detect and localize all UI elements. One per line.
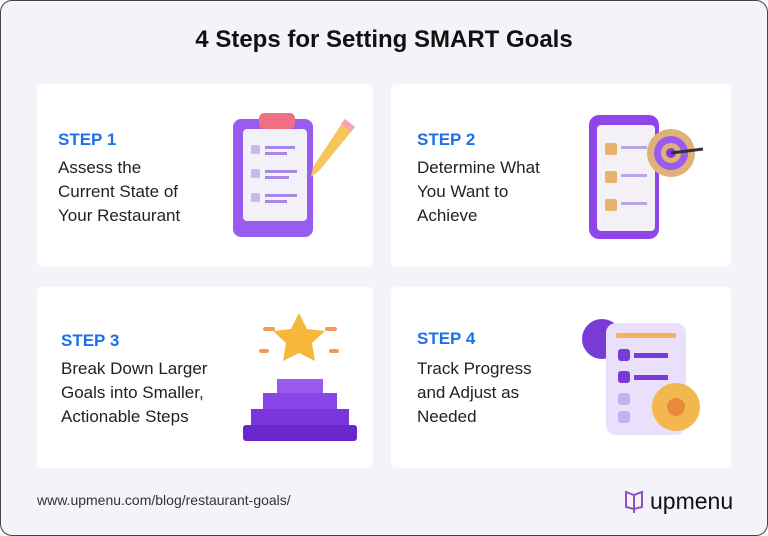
icon: clipboard with pencil — [233, 113, 355, 237]
logo: upmenu: upmenu — [650, 488, 733, 514]
step 3 label: STEP 3 — [61, 331, 119, 350]
step 1 text — [58, 158, 180, 225]
step 1 text: Current State of — [58, 182, 178, 201]
icon: checklist with target — [589, 115, 704, 239]
step 4 label: STEP 4 — [417, 329, 475, 348]
step 2 text: You Want to — [417, 182, 508, 201]
step 2 text — [417, 158, 540, 225]
step 1 text: Assess the — [58, 158, 141, 177]
step 1 label: STEP 1 — [58, 130, 116, 149]
step 4 text: Needed — [417, 407, 477, 426]
step 3 text: Break Down Larger — [61, 359, 207, 378]
title: 4 Steps for Setting SMART Goals — [195, 26, 573, 53]
panel: step 4 — [391, 287, 731, 468]
step 3 text: Goals into Smaller, — [61, 383, 204, 402]
icon: star on podium — [243, 313, 357, 441]
step 4 text — [417, 359, 532, 426]
step 3 text: Actionable Steps — [61, 407, 189, 426]
step 3 text — [61, 359, 208, 426]
panel: step 3 — [37, 287, 373, 468]
panel: step 1 — [37, 84, 373, 267]
step 2 label: STEP 2 — [417, 130, 475, 149]
step 2 text: Achieve — [417, 206, 477, 225]
source url: www.upmenu.com/blog/restaurant-goals/ — [37, 492, 291, 508]
icon: checklist with gears — [582, 319, 700, 435]
step 4 text: Track Progress — [417, 359, 532, 378]
step 2 text: Determine What — [417, 158, 540, 177]
panel: step 2 — [391, 84, 731, 267]
step 1 text: Your Restaurant — [58, 206, 180, 225]
step 4 text: and Adjust as — [417, 383, 519, 402]
